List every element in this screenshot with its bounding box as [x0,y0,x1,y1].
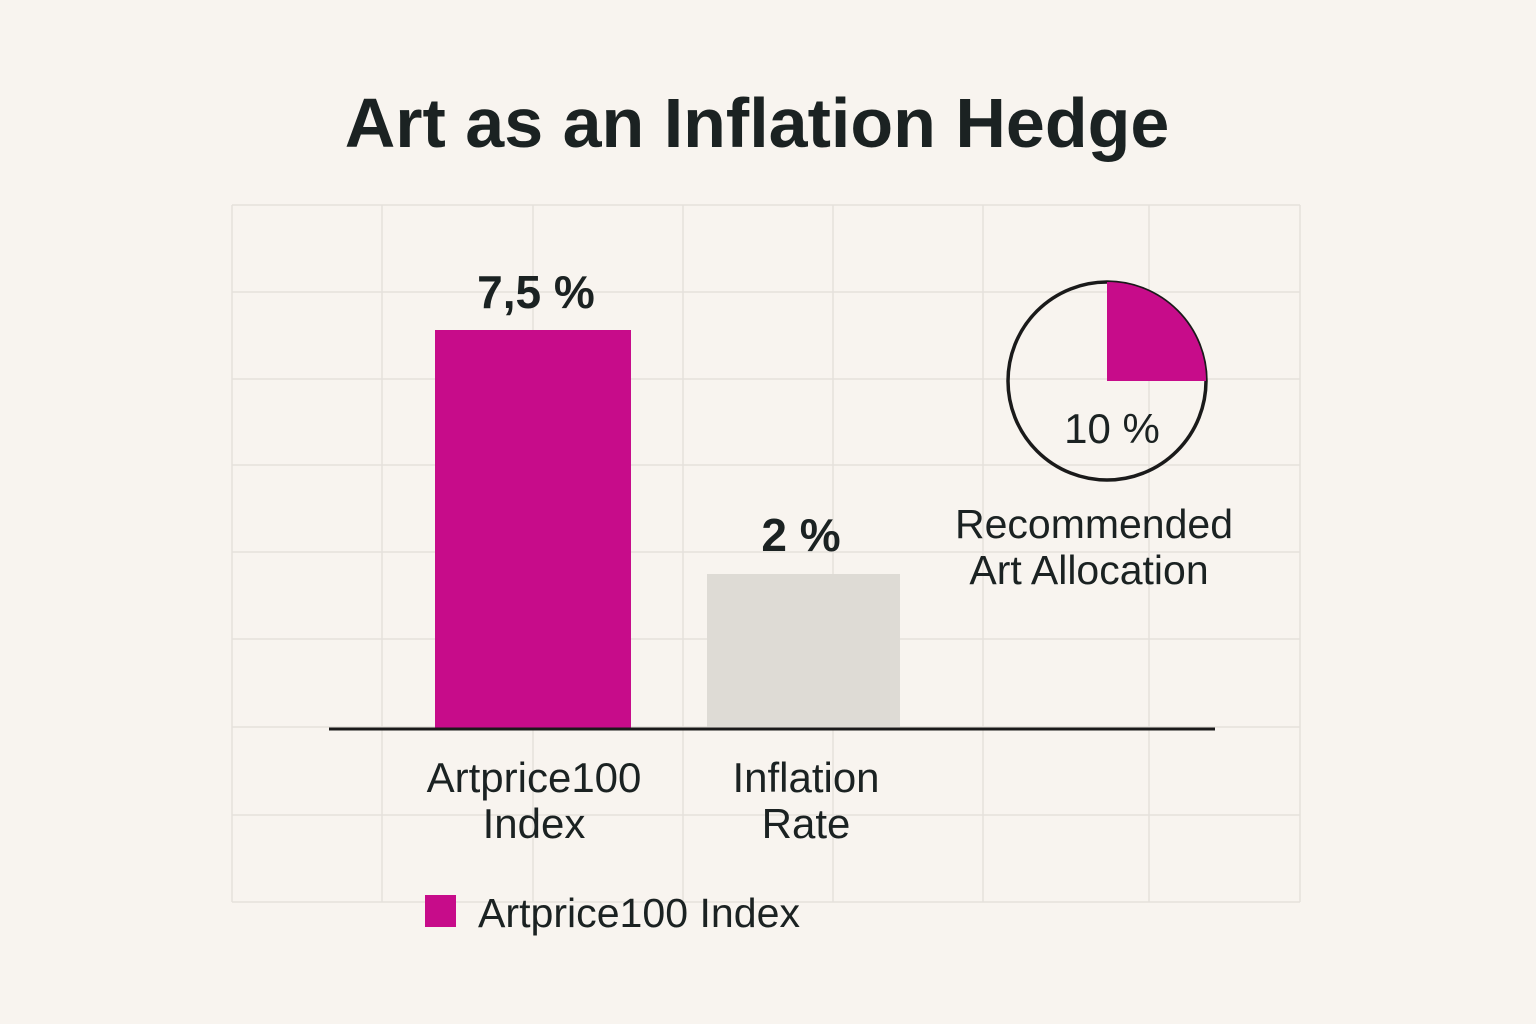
value label: 2 %: 2 % [761,509,841,561]
category label: Artprice100 Index: Index [483,800,585,847]
bar: Inflation Rate [707,574,900,727]
pie chart: recommended art allocation [1008,282,1206,480]
category label: Inflation Rate: Rate [762,800,850,847]
pie chart: recommended art allocation: 10 % [1064,405,1160,452]
bar: Artprice100 Index [435,330,631,728]
x axis [329,728,1215,730]
category label: Inflation Rate: Inflation [732,754,880,801]
title: Art as an Inflation Hedge [345,84,1169,162]
pie caption: Recommended [955,501,1233,547]
category label: Artprice100 Index: Artprice100 [427,754,641,801]
pie caption: Art Allocation [969,547,1209,593]
legend: Artprice100 Index [478,890,800,936]
value label: 7,5 %: 7,5 % [477,266,595,318]
